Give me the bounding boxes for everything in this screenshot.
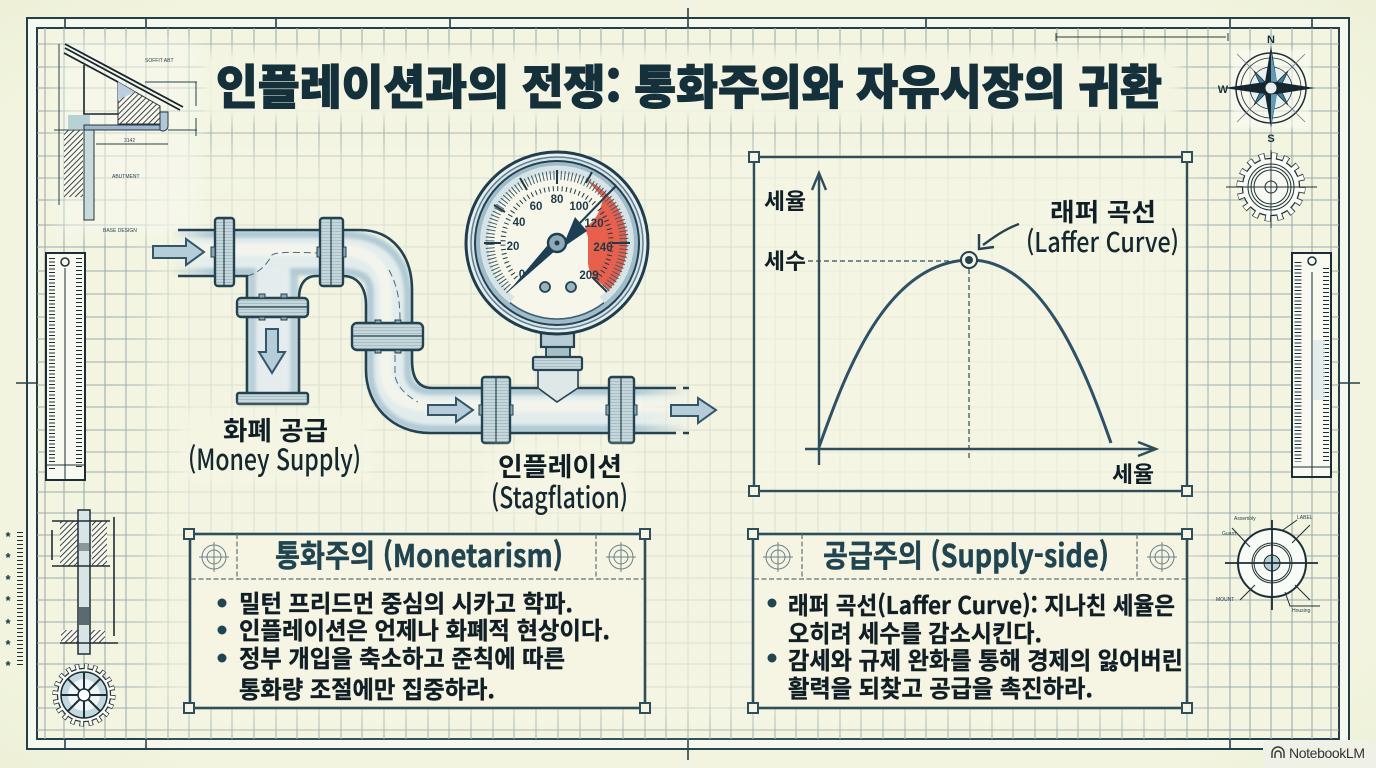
panel bullets: 밀턴 프리드먼 중심의 시카고 학파. bbox=[239, 584, 573, 619]
panel bullets: 정부 개입을 축소하고 준칙에 따른 bbox=[239, 639, 565, 674]
gauge: 209 bbox=[579, 270, 599, 282]
chart callout arrow bbox=[979, 224, 1019, 249]
gauge: 100 bbox=[569, 201, 589, 213]
chart curve bbox=[819, 260, 1111, 447]
chart peak marker bbox=[961, 252, 977, 268]
arrow: pipe inlet bbox=[153, 239, 204, 265]
icon: bottom-left shaft and gear: * bbox=[5, 593, 11, 608]
chart guide lines bbox=[808, 261, 969, 458]
icon: compass rose bbox=[1218, 34, 1315, 145]
icon: bottom-right bearing: Assembly bbox=[1234, 516, 1256, 522]
chart labels: 세율 bbox=[1112, 457, 1154, 489]
gauge: 120 bbox=[584, 218, 604, 230]
icon: bottom-left shaft and gear: * bbox=[5, 572, 11, 587]
panel heading: 통화주의 (Monetarism) bbox=[275, 531, 563, 576]
icon: roof section detail: 3142 bbox=[124, 138, 135, 144]
panel bullets: 인플레이션은 언제나 화폐적 현상이다. bbox=[239, 611, 610, 646]
pipe outlines bbox=[178, 230, 689, 388]
label: money supply bbox=[182, 411, 368, 479]
chart labels: (Laffer Curve) bbox=[1026, 221, 1179, 260]
icon: bottom-left shaft and gear: * bbox=[5, 637, 11, 652]
panel bullets: 래퍼 곡선(Laffer Curve): 지나친 세율은 bbox=[788, 586, 1175, 621]
icon: right ruler bbox=[1292, 253, 1331, 477]
icon: bottom-right bearing: LABEL bbox=[1297, 515, 1313, 521]
flanges bbox=[211, 218, 637, 443]
icon: bottom-left shaft and gear: * bbox=[5, 616, 11, 631]
arrow: downward flow bbox=[259, 329, 285, 373]
panel: supply-side bbox=[748, 529, 1192, 713]
gauge stem bbox=[533, 332, 582, 402]
icon: target right bbox=[1147, 542, 1177, 572]
panel heading: 공급주의 (Supply-side) bbox=[823, 531, 1109, 576]
icon: roof section detail: ABUTMENT bbox=[112, 174, 140, 180]
chart labels: 세수 bbox=[764, 244, 806, 276]
diagram: pipe system bbox=[153, 152, 716, 443]
panel bullets bbox=[768, 586, 1183, 704]
chart: Laffer curve bbox=[749, 152, 1192, 496]
panel bullets bbox=[218, 584, 610, 705]
icon: bottom-left shaft and gear: * bbox=[5, 658, 11, 673]
chart labels: 세율 bbox=[764, 184, 806, 216]
icon: roof section detail: SOFFIT ABT bbox=[145, 58, 174, 64]
chart axes bbox=[805, 173, 1156, 465]
panel bullets: 통화량 조절에만 집중하라. bbox=[239, 670, 495, 705]
panel bullets: 오히려 세수를 감소시킨다. bbox=[788, 614, 1042, 649]
icon: compass rose: S bbox=[1267, 133, 1275, 145]
panel: monetarism bbox=[184, 529, 650, 713]
icon: bottom-left shaft and gear: * bbox=[5, 550, 11, 565]
icon: bottom-left shaft and gear bbox=[5, 510, 118, 724]
label: stagflation bbox=[488, 447, 632, 517]
icon: target right bbox=[606, 542, 636, 572]
icon: bottom-right bearing: Housing bbox=[1292, 608, 1311, 614]
gauge scale bbox=[503, 189, 611, 281]
icon: top dimension line bbox=[1056, 33, 1228, 41]
badge: NotebookLM bbox=[1263, 740, 1376, 768]
icon: roof section detail: BASE DESIGN bbox=[103, 228, 137, 234]
icon: bottom-left shaft and gear: * bbox=[5, 529, 11, 544]
badge: NotebookLM: NotebookLM bbox=[1289, 745, 1365, 761]
panel bullets: 감세와 규제 완화를 통해 경제의 잃어버린 bbox=[788, 641, 1183, 676]
gauge: 60 bbox=[530, 201, 542, 213]
icon: roof section detail bbox=[54, 40, 200, 235]
gauge: 40 bbox=[513, 217, 525, 229]
icon: left ruler bbox=[46, 253, 85, 480]
icon: target left bbox=[199, 542, 229, 572]
gauge needle bbox=[508, 217, 587, 292]
gauge screws bbox=[540, 282, 550, 292]
icon: bottom-right bearing bbox=[1216, 515, 1320, 614]
gauge red zone bbox=[585, 180, 627, 290]
chart labels bbox=[764, 184, 1179, 489]
label: stagflation: (Stagflation) bbox=[491, 475, 628, 517]
arrow: pipe outlet bbox=[671, 398, 716, 423]
title: 인플레이션과의 전쟁: 통화주의와 자유시장의 귀환 bbox=[216, 49, 1162, 118]
label: stagflation: 인플레이션 bbox=[498, 447, 622, 484]
chart labels: 래퍼 곡선 bbox=[1050, 193, 1156, 229]
soft wash behind central content bbox=[150, 150, 1190, 720]
pipe body bbox=[170, 250, 690, 410]
arrow: through pipe bbox=[428, 398, 473, 422]
label: money supply: (Money Supply) bbox=[188, 437, 361, 479]
panel bullets: 활력을 되찾고 공급을 촉진하라. bbox=[788, 669, 1093, 704]
gauge bbox=[466, 152, 648, 334]
gauge: 0 bbox=[519, 269, 525, 281]
icon: compass rose: N bbox=[1267, 34, 1275, 46]
pipe interior detail bbox=[247, 252, 418, 402]
label: money supply: 화폐 공급 bbox=[223, 411, 328, 448]
gauge: 20 bbox=[507, 241, 519, 253]
gauge: 80 bbox=[551, 194, 563, 206]
icon: target left bbox=[763, 542, 793, 572]
icon: compass rose: W bbox=[1218, 84, 1229, 96]
icon: bottom-right bearing: MOUNT bbox=[1216, 597, 1234, 603]
icon: right gear bbox=[1226, 150, 1317, 228]
icon: bottom-right bearing: Guard bbox=[1222, 531, 1236, 537]
gauge: 240 bbox=[593, 242, 613, 254]
